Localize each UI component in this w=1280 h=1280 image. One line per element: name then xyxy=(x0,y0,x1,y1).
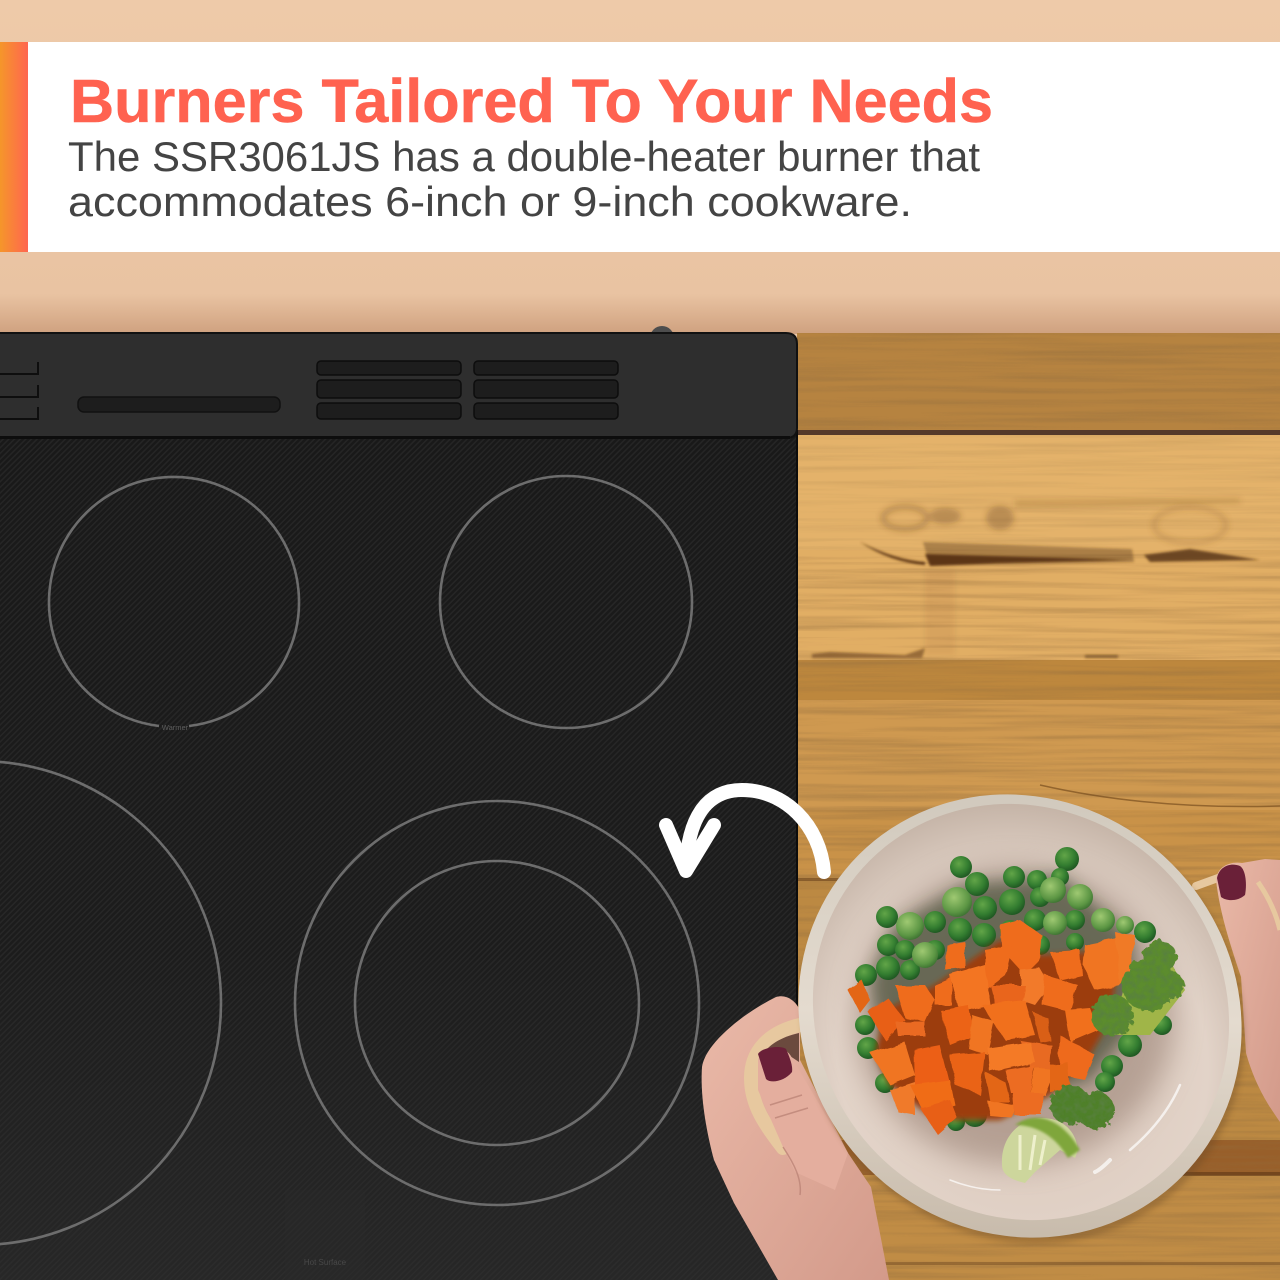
right hand xyxy=(1196,859,1280,1122)
left bowl handle xyxy=(751,1025,800,1148)
hot surface indicator: Hot Surface xyxy=(304,1258,347,1267)
bowl xyxy=(707,703,1280,1280)
gap between handle and thumb xyxy=(759,1033,799,1062)
control panel xyxy=(0,333,797,439)
bowl highlights xyxy=(950,1085,1180,1190)
broccoli right xyxy=(1091,941,1185,1036)
food shadow xyxy=(855,865,1175,1165)
carrot base xyxy=(875,940,1120,1120)
left thumb xyxy=(758,1048,848,1190)
hot surface indicator xyxy=(285,1190,365,1280)
subtitle xyxy=(68,133,980,225)
wood knots and cracks xyxy=(797,498,1280,1265)
right bowl handle xyxy=(1196,878,1218,886)
vent slots left xyxy=(317,361,461,419)
arrow pointing to burner xyxy=(666,790,824,872)
carrots xyxy=(848,920,1135,1135)
background wall xyxy=(0,0,1280,334)
peas xyxy=(855,847,1172,1131)
pale plank wash xyxy=(797,435,1280,550)
food: vegetables xyxy=(848,847,1185,1183)
cooktop glass surface xyxy=(0,430,798,1280)
burner: front right double-heater xyxy=(295,801,699,1205)
pea cluster shadow xyxy=(870,875,1140,1115)
broccoli bottom xyxy=(1002,1085,1114,1183)
burner: rear right xyxy=(440,476,692,728)
subtitle: The SSR3061JS has a double-heater burner that xyxy=(68,133,980,180)
burner: rear left xyxy=(49,477,299,732)
display slot xyxy=(78,397,280,412)
left hand xyxy=(702,996,889,1280)
title: Burners Tailored To Your Needs xyxy=(70,67,993,135)
wood countertop xyxy=(797,333,1280,1280)
plank seam xyxy=(797,430,1280,435)
vent slots right xyxy=(474,361,618,419)
header banner xyxy=(0,42,1280,252)
left hand creases xyxy=(770,1095,808,1195)
burner: rear left: Warmer xyxy=(162,723,189,732)
accent bar xyxy=(0,42,28,252)
burner: front left large xyxy=(0,761,221,1245)
left indicator slots xyxy=(0,362,38,419)
left thumbnail xyxy=(758,1047,792,1081)
right thumbnail xyxy=(1217,865,1246,900)
subtitle: accommodates 6-inch or 9-inch cookware. xyxy=(68,178,912,225)
knob behind cooktop xyxy=(650,326,674,350)
